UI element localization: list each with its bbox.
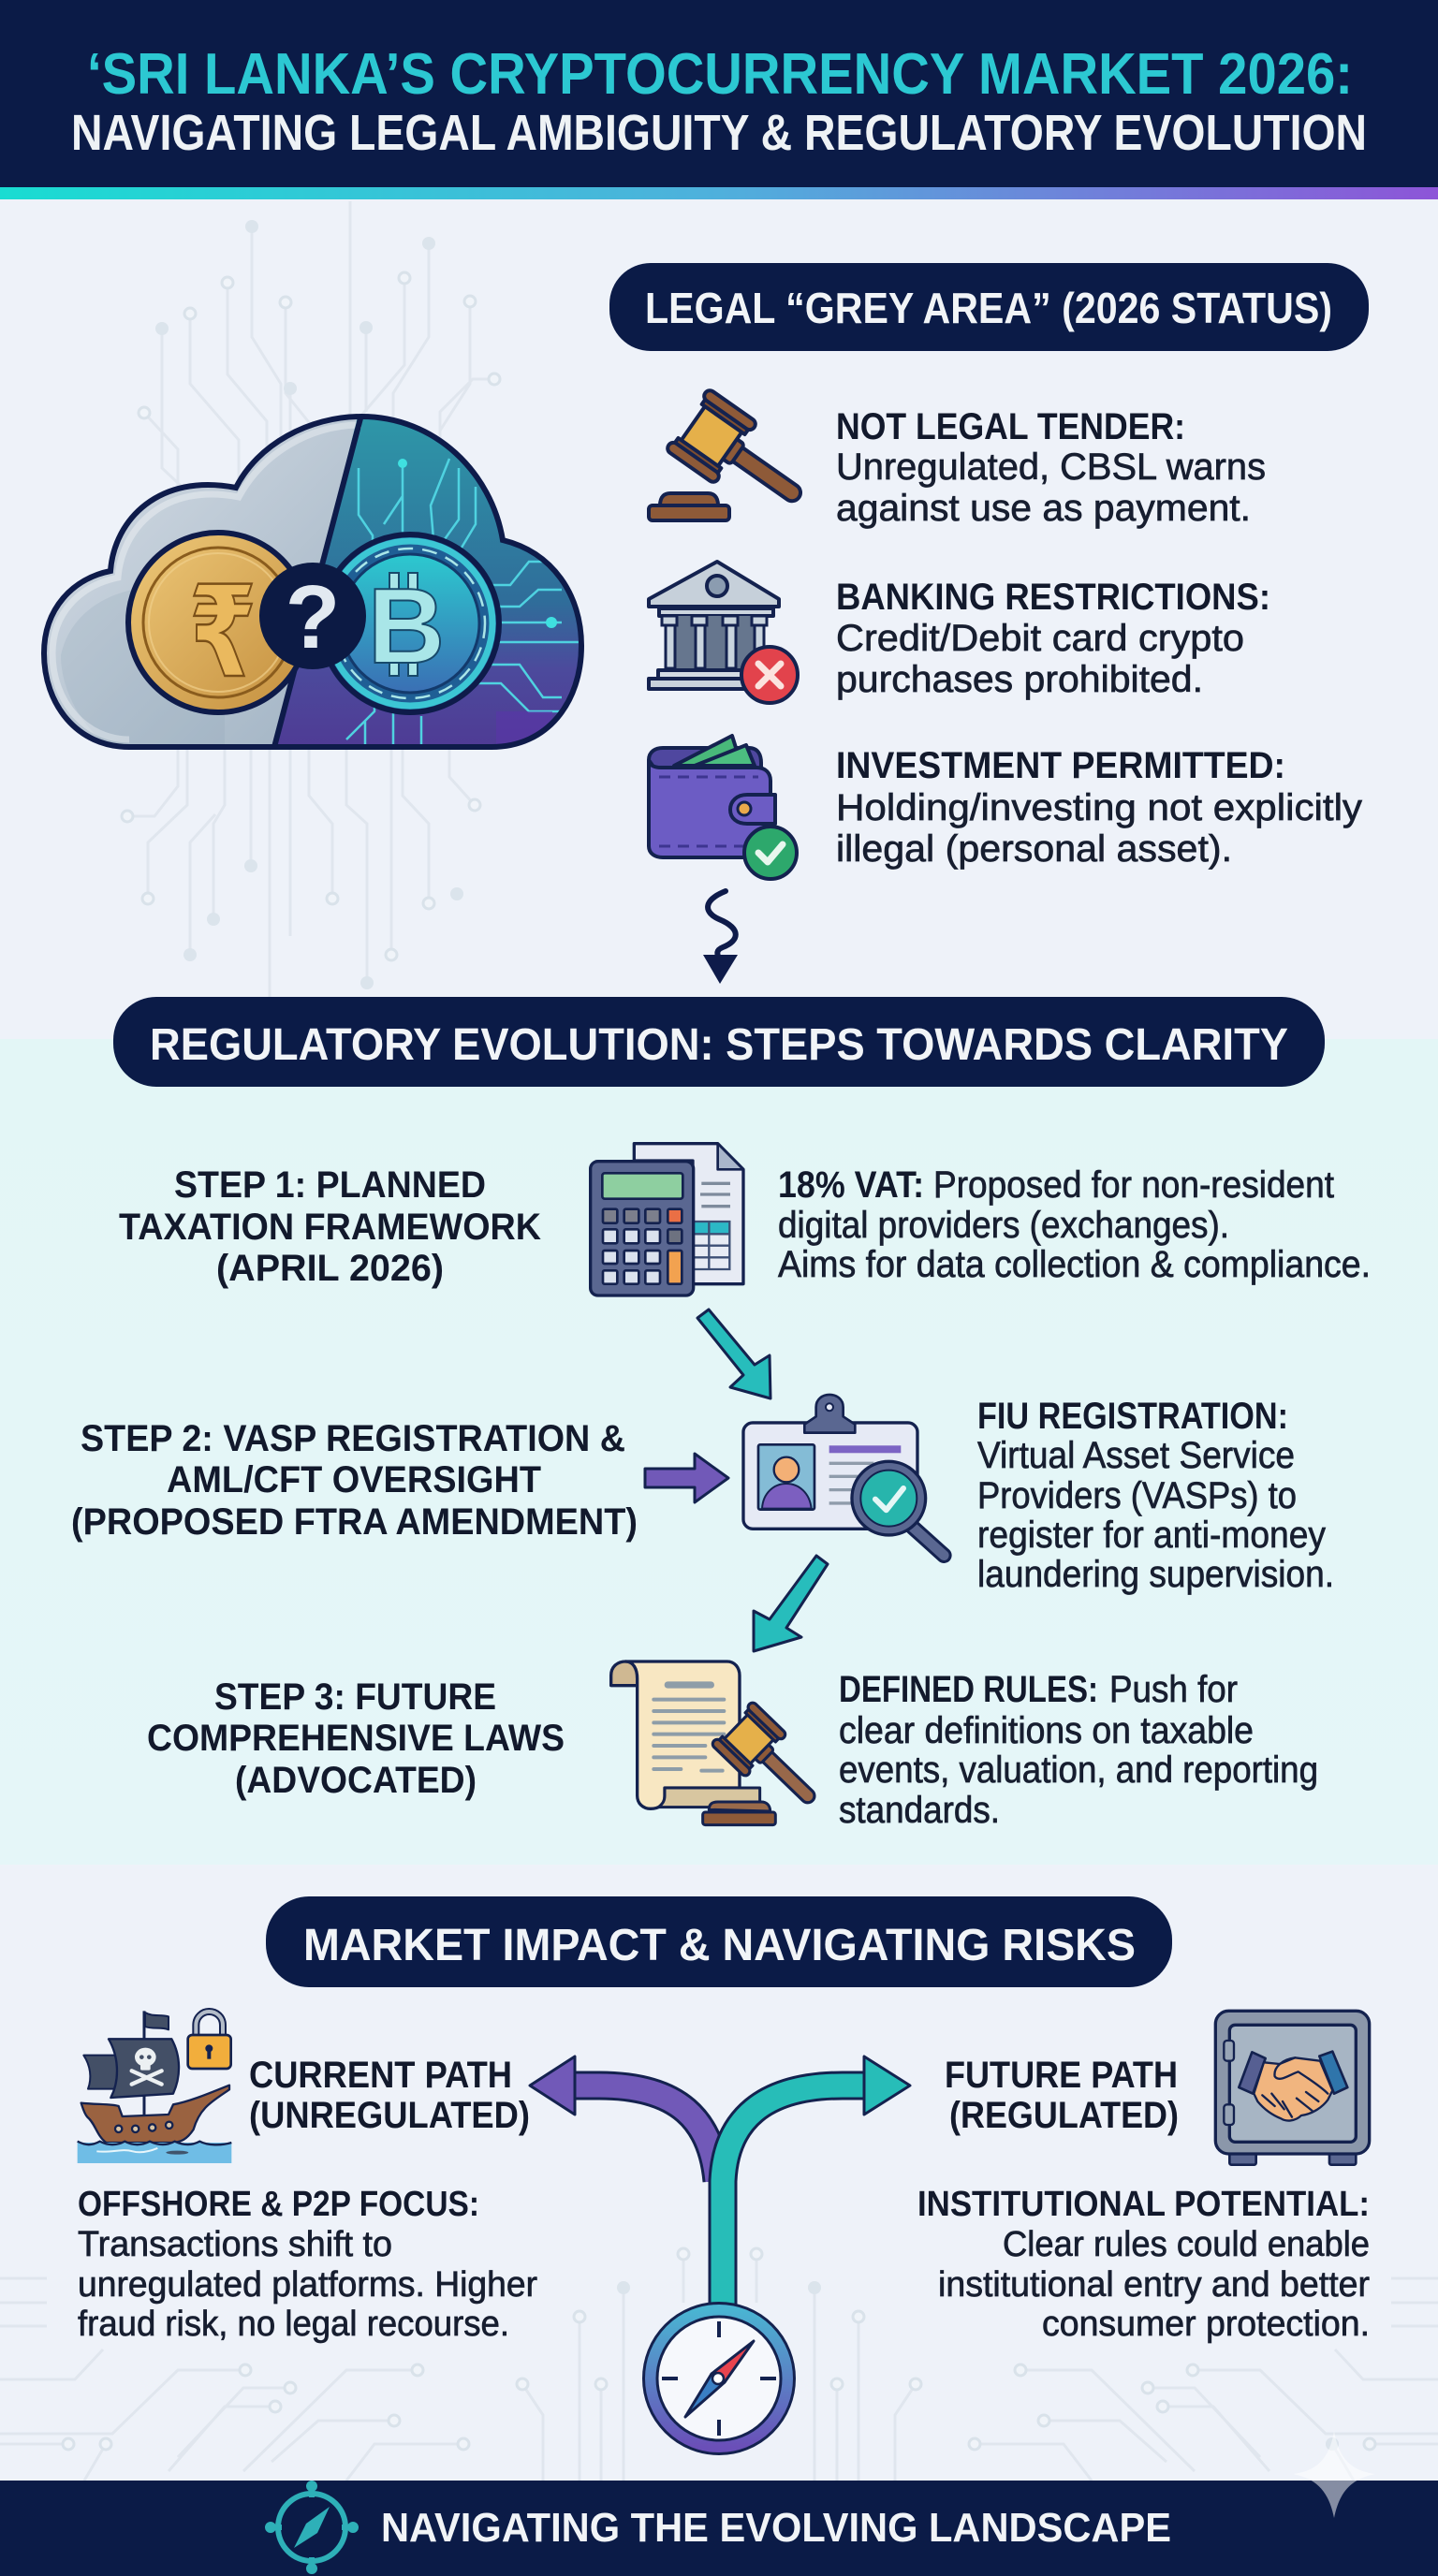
text: FIU registration: FIU REGISTRATION: (977, 1396, 1288, 1437)
text: not legal tender: against use as payment. (836, 488, 1251, 529)
rupee coin: ₹ (189, 559, 257, 706)
icon: safe with handshake (1215, 2011, 1370, 2165)
text: banking restrictions: Credit/Debit card crypto (836, 618, 1244, 659)
section heading: market impact (266, 1896, 1172, 1987)
future path label: (REGULATED) (949, 2095, 1179, 2136)
text: FIU registration: Virtual Asset Service (977, 1435, 1295, 1476)
future path label (945, 2055, 1179, 2136)
text: institutional potential: consumer protection. (1042, 2305, 1370, 2344)
section heading: regulatory evolution (113, 997, 1325, 1087)
question mark circle: ? (286, 567, 340, 667)
section heading: legal grey area: LEGAL “GREY AREA” (2026 STATUS) (645, 284, 1332, 332)
step 2 label: (PROPOSED FTRA AMENDMENT) (71, 1501, 638, 1543)
step 2 label: AML/CFT OVERSIGHT (167, 1459, 541, 1500)
watermark sparkle (1293, 2431, 1375, 2518)
text: offshore and P2P focus (78, 2185, 537, 2344)
question mark circle (259, 563, 366, 669)
icon: pirate ship and padlock (78, 2011, 231, 2163)
text: banking restrictions: BANKING RESTRICTIONS: (836, 577, 1270, 618)
future path label: FUTURE PATH (945, 2055, 1178, 2096)
text: institutional potential: Clear rules could enable (1003, 2225, 1370, 2264)
icon: scroll with gavel (611, 1661, 833, 1825)
section heading: legal grey area (609, 263, 1369, 351)
current path label: CURRENT PATH (249, 2055, 512, 2096)
text: investment permitted (836, 745, 1362, 870)
text: defined rules (839, 1669, 1318, 1831)
text: offshore and P2P focus: OFFSHORE & P2P FOCUS: (78, 2185, 479, 2224)
icon: compass (644, 2304, 794, 2453)
section heading: regulatory evolution: REGULATORY EVOLUTION: STEPS TOWARDS CLARITY (150, 1020, 1288, 1070)
rupee coin (128, 533, 308, 712)
header banner (0, 0, 1438, 199)
text: investment permitted: Holding/investing not explicitly (836, 787, 1362, 828)
text: investment permitted: illegal (personal asset). (836, 828, 1232, 870)
text: defined rules: events, valuation, and reporting (839, 1749, 1318, 1791)
circuit background: bottom (0, 2248, 1438, 2481)
text: 18% VAT: digital providers (exchanges). (778, 1205, 1229, 1246)
step 3 label (147, 1676, 565, 1801)
text: not legal tender (836, 406, 1266, 529)
text: FIU registration (977, 1396, 1334, 1595)
step 1 label: TAXATION FRAMEWORK (119, 1207, 541, 1248)
text: offshore and P2P focus: Transactions shift to (78, 2225, 392, 2264)
icon: bank with red cross (649, 562, 798, 703)
text: FIU registration: Providers (VASPs) to (977, 1475, 1297, 1516)
step 1 label: (APRIL 2026) (216, 1248, 444, 1289)
arrow: purple path left (530, 2056, 717, 2181)
step 3 label: (ADVOCATED) (235, 1760, 477, 1801)
footer banner (0, 2481, 1438, 2576)
circuit background: top left (122, 201, 500, 1002)
text: not legal tender: NOT LEGAL TENDER: (836, 406, 1185, 447)
step 1 label: STEP 1: PLANNED (174, 1164, 486, 1206)
arrow: step 1 to step 2 (697, 1310, 770, 1398)
text: defined rules: Push for (1109, 1669, 1238, 1710)
step 2 label: STEP 2: VASP REGISTRATION & (81, 1418, 625, 1459)
text: defined rules: clear definitions on taxable (839, 1710, 1254, 1751)
text: not legal tender: Unregulated, CBSL warns (836, 446, 1266, 488)
icon: calculator and document (591, 1144, 743, 1295)
text: banking restrictions: purchases prohibited. (836, 659, 1203, 700)
text: FIU registration: laundering supervision. (977, 1554, 1334, 1595)
text: institutional potential: INSTITUTIONAL POTENTIAL: (917, 2185, 1370, 2224)
text: 18% VAT (778, 1164, 1371, 1285)
current path label (249, 2055, 530, 2136)
text: 18% VAT: Aims for data collection & compliance. (778, 1244, 1371, 1285)
text: FIU registration: register for anti-money (977, 1515, 1326, 1556)
regulatory section background band (0, 1039, 1438, 1865)
step 3 label: STEP 3: FUTURE (214, 1676, 496, 1718)
text: defined rules: standards. (839, 1790, 1000, 1831)
text: banking restrictions (836, 577, 1270, 700)
section heading: market impact: MARKET IMPACT & NAVIGATING RISKS (303, 1921, 1136, 1970)
arrow: step 2 label to card (645, 1454, 728, 1502)
arrow: step 2 to step 3 (754, 1556, 828, 1651)
bitcoin coin: B (368, 567, 445, 686)
icon: cloud with rupee coin, question mark and bitcoin (37, 412, 590, 758)
step 3 label: COMPREHENSIVE LAWS (147, 1718, 565, 1759)
arrow: teal path right (723, 2056, 910, 2305)
icon: footer compass (268, 2483, 356, 2571)
text: institutional potential (917, 2185, 1370, 2344)
icon: ID card with magnifier (743, 1395, 944, 1556)
text: institutional potential: institutional entry and better (938, 2265, 1370, 2305)
icon: wallet with check (649, 736, 797, 879)
text: 18% VAT: Proposed for non-resident (933, 1164, 1334, 1206)
footer text: NAVIGATING THE EVOLVING LANDSCAPE (381, 2505, 1171, 2551)
text: investment permitted: INVESTMENT PERMITTED: (836, 745, 1285, 786)
current path label: (UNREGULATED) (249, 2095, 530, 2136)
arrow: squiggle down (703, 891, 738, 984)
icon: gavel (649, 388, 820, 528)
text: offshore and P2P focus: fraud risk, no legal recourse. (78, 2305, 509, 2344)
text: 18% VAT: 18% VAT: (778, 1164, 924, 1206)
bitcoin coin (321, 534, 499, 712)
text: defined rules: DEFINED RULES: (839, 1669, 1098, 1710)
step 1 label (119, 1164, 541, 1289)
step 2 label (71, 1418, 638, 1543)
text: offshore and P2P focus: unregulated platforms. Higher (78, 2265, 537, 2305)
